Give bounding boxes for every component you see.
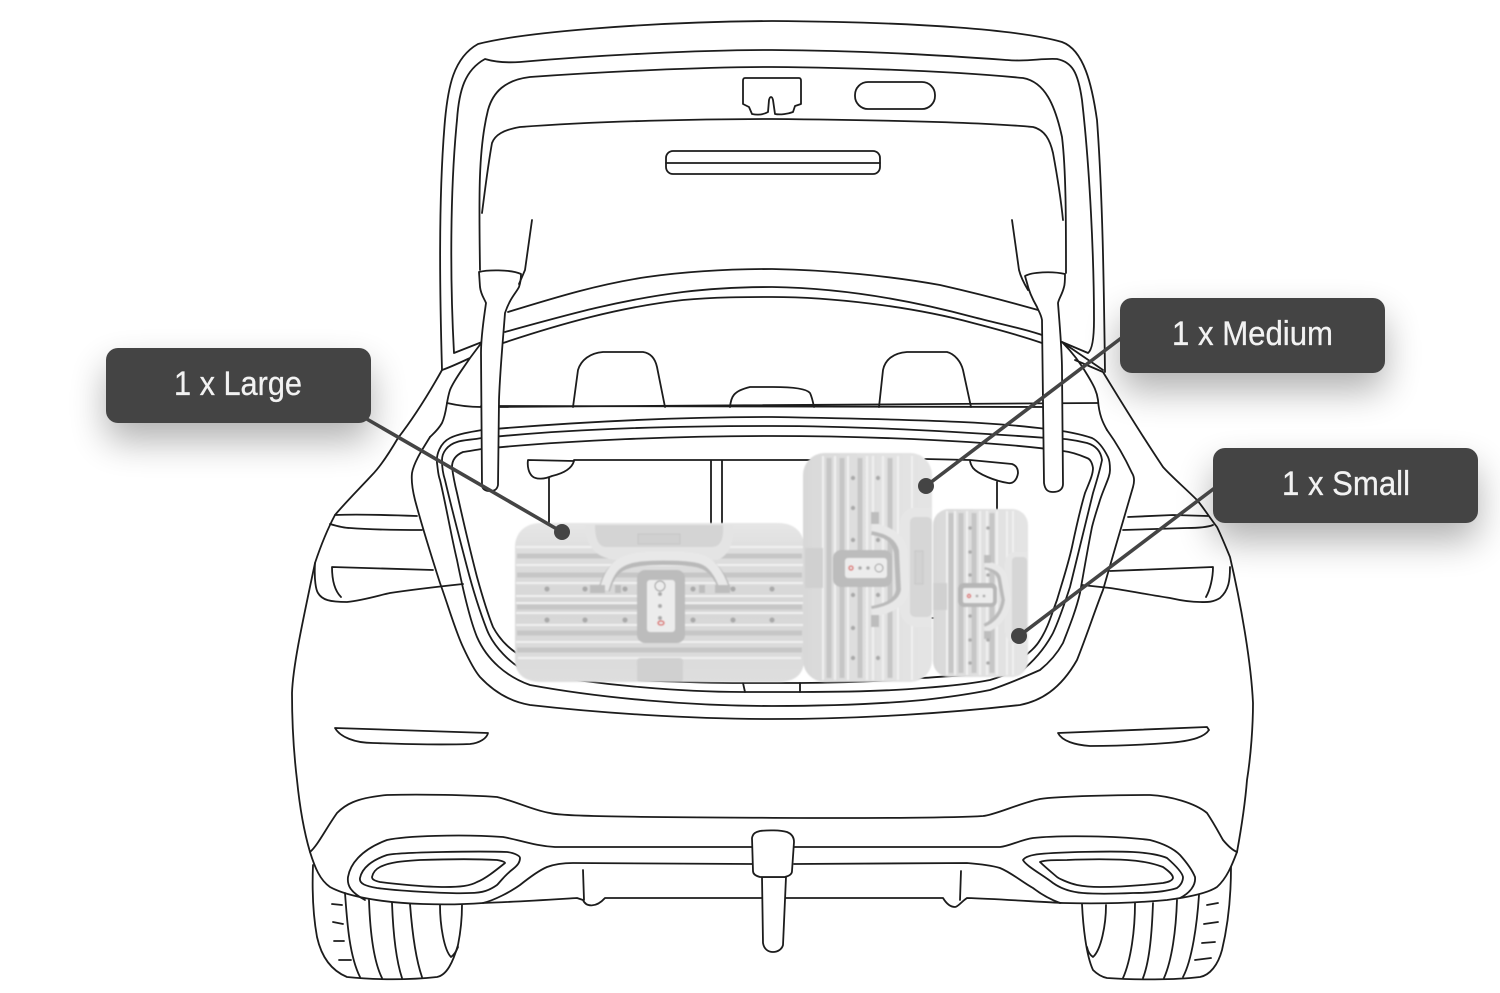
boot opening outer edge xyxy=(412,430,1134,719)
rear window arcs xyxy=(503,269,1042,343)
bumper vertical trims xyxy=(583,870,961,900)
right headrest xyxy=(879,352,971,407)
tailgate outer frame xyxy=(440,21,1105,372)
tailgate glass surround xyxy=(479,67,1066,273)
left exhaust tip xyxy=(360,852,520,893)
leader line: large xyxy=(365,418,570,540)
callout: 1 x Small xyxy=(1011,448,1478,644)
luggage group xyxy=(515,453,1028,682)
leader line: small xyxy=(1011,487,1216,644)
boot interior walls xyxy=(528,459,1018,618)
right bumper reflector xyxy=(1058,727,1209,746)
right exhaust tip xyxy=(1023,852,1183,894)
bumper upper contour xyxy=(310,795,1237,852)
bumper centre band xyxy=(348,836,1195,903)
tyres xyxy=(313,865,1231,979)
callout: 1 x Medium: 1 x Medium xyxy=(1172,315,1333,353)
left strut xyxy=(479,220,532,491)
callout: 1 x Small: 1 x Small xyxy=(1282,465,1410,503)
tailgate handle xyxy=(743,78,801,115)
boot latch xyxy=(743,683,800,692)
medium suitcase xyxy=(803,453,932,682)
leader line: medium xyxy=(918,336,1124,494)
right strut xyxy=(1012,220,1065,492)
tailgate inner frame xyxy=(451,50,1094,353)
brake light xyxy=(666,151,880,174)
tailgate release pill xyxy=(855,82,935,109)
car body outline xyxy=(292,360,1253,907)
hinge lines xyxy=(430,342,1107,437)
rear window xyxy=(482,119,1063,220)
callout: 1 x Large xyxy=(106,348,570,540)
callout: 1 x Large: 1 x Large xyxy=(174,365,302,403)
rear shelf xyxy=(447,403,1098,407)
boot seals xyxy=(437,417,1110,706)
tow hitch xyxy=(752,830,794,952)
left headrest xyxy=(573,352,665,407)
centre headrest xyxy=(730,387,814,407)
left taillight xyxy=(315,515,463,602)
car line drawing xyxy=(292,21,1253,979)
callout: 1 x Medium xyxy=(918,298,1385,494)
small suitcase xyxy=(933,509,1028,677)
large suitcase xyxy=(515,523,804,682)
right taillight xyxy=(1082,515,1230,602)
left bumper reflector xyxy=(335,728,488,744)
